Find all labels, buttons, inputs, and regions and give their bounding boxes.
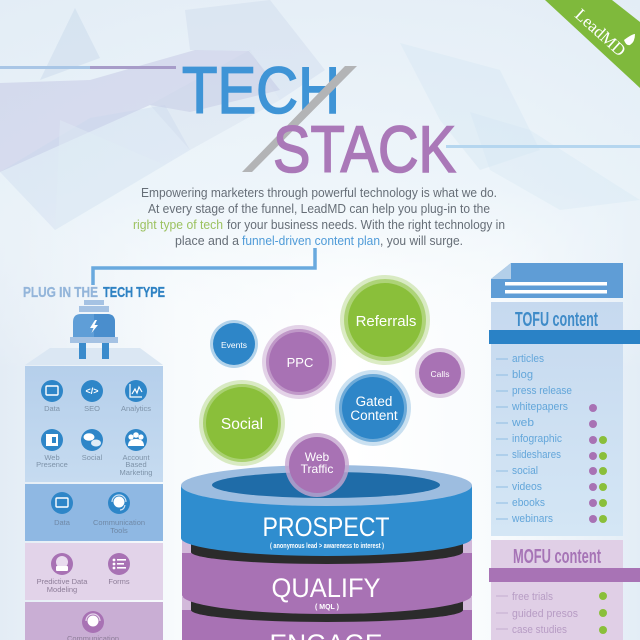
content list: blog	[512, 369, 533, 381]
content list: videos	[512, 481, 542, 493]
icon: account based marketing	[120, 429, 152, 477]
icon: web presence: Web	[44, 453, 60, 462]
panel: tech types	[25, 348, 163, 482]
icon: communication tools: Tools	[110, 526, 128, 535]
panel: tofu content	[489, 302, 640, 536]
bubble: web traffic: Traffic	[301, 462, 333, 476]
intro paragraph: Empowering marketers through powerful technology is what we do.	[141, 186, 497, 200]
title: TECH	[182, 53, 340, 127]
content list: ebooks	[512, 497, 545, 509]
bubble: gated content: Gated	[356, 394, 392, 409]
panel: tofu header tab	[491, 263, 623, 298]
decorative rule left	[0, 66, 176, 69]
bubble: web traffic	[285, 433, 349, 497]
bubble: social: Social	[221, 416, 263, 433]
connector arrow	[93, 248, 315, 285]
content list: infographic	[512, 433, 562, 445]
logo ribbon: LeadMD: LeadMD	[571, 5, 629, 60]
icon: account based marketing: Based	[125, 460, 147, 469]
bubble: ppc	[262, 325, 336, 399]
icon: communication tools: Communication	[93, 518, 145, 527]
funnel stack	[181, 465, 472, 640]
panel: light purple tech band	[25, 543, 163, 600]
layer: qualify: ( MQL )	[315, 604, 339, 611]
icon: plug	[70, 300, 118, 359]
content list: guided presos	[512, 608, 578, 620]
layer: prospect: PROSPECT	[262, 512, 390, 542]
bubble: ppc: PPC	[287, 355, 313, 370]
bubble: calls: Calls	[431, 369, 449, 379]
bubble: social	[199, 380, 285, 466]
icon: analytics: Analytics	[121, 404, 151, 413]
panel: blue tech band	[25, 484, 163, 541]
bubble: gated content	[335, 370, 411, 446]
panel: mofu content	[489, 540, 640, 640]
icon: forms: Forms	[108, 577, 130, 586]
layer: qualify: QUALIFY	[272, 573, 380, 603]
content list: press release	[512, 385, 572, 397]
bubble: events	[210, 320, 258, 368]
heading: plug in the tech type	[23, 284, 165, 301]
content list: web	[511, 417, 534, 429]
bubble: events: Events	[221, 340, 247, 350]
content list	[496, 353, 572, 525]
purple dots	[589, 404, 597, 523]
intro paragraph: right type of tech	[133, 218, 223, 232]
logo ribbon: LeadMD	[545, 0, 640, 88]
icon: predictive data modeling	[37, 553, 88, 594]
icon: seo: SEO	[84, 404, 100, 413]
icon: account based marketing: Account	[122, 453, 150, 462]
intro paragraph: funnel-driven content plan	[242, 234, 380, 248]
icon: predictive data modeling: Modeling	[47, 585, 77, 594]
icon: predictive data modeling: Predictive Data	[37, 577, 88, 586]
content list: whitepapers	[511, 401, 568, 413]
icon: web presence: Presence	[36, 460, 68, 469]
heading: plug in the tech type: PLUG IN THE	[23, 284, 98, 301]
content list: slideshares	[512, 449, 561, 461]
intro paragraph: place and a	[175, 234, 239, 248]
icon: account based marketing: Marketing	[120, 468, 152, 477]
icon: data: Data	[44, 404, 61, 413]
content list: webinars	[511, 513, 553, 525]
content list: articles	[512, 353, 544, 365]
content list: free trials	[512, 591, 553, 603]
content list: case studies	[512, 624, 567, 636]
panel: dark purple tech band	[25, 602, 163, 640]
heading: plug in the tech type: TECH TYPE	[103, 284, 165, 301]
bubble: referrals	[340, 275, 430, 365]
green dots	[599, 436, 607, 523]
icon: seo: </>	[85, 386, 99, 396]
icon: data: Data	[54, 518, 71, 527]
layer: prospect	[262, 512, 390, 550]
intro paragraph	[133, 186, 505, 248]
bubble: referrals: Referrals	[356, 313, 416, 330]
intro paragraph: for your business needs. With the right technology in	[227, 218, 505, 232]
icon: communication tools	[93, 492, 145, 535]
title	[182, 53, 456, 186]
intro paragraph: , you will surge.	[380, 234, 463, 248]
green dots	[599, 592, 607, 634]
content list	[496, 591, 578, 636]
bubble: gated content: Content	[350, 408, 398, 423]
decorative rule right	[446, 145, 640, 148]
bubble: web traffic: Web	[305, 450, 330, 464]
content list: social	[512, 465, 538, 477]
ribbon	[489, 330, 640, 344]
icon: social: Social	[82, 453, 103, 462]
icon: seo	[81, 380, 103, 413]
title: STACK	[273, 112, 456, 186]
ribbon	[489, 568, 640, 582]
bubble: calls	[415, 348, 465, 398]
icon: web presence	[36, 429, 68, 469]
layer: prospect: ( anonymous lead > awareness to interest )	[270, 543, 384, 550]
intro paragraph: At every stage of the funnel, LeadMD can help you plug-in to the	[148, 202, 490, 216]
